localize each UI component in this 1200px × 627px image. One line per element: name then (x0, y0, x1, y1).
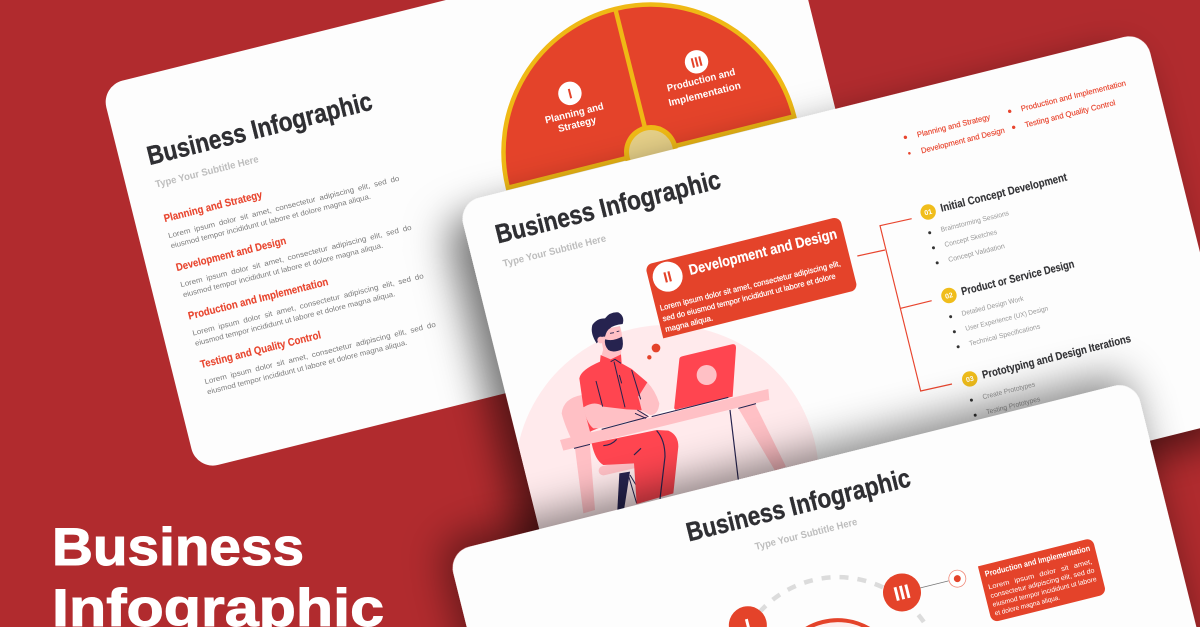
item: production and implementation: eiusmod tempor incididunt ut labore et dolore magna aliqua. (194, 289, 396, 348)
connector to target (920, 581, 949, 588)
slide 3 heading: Business Infographic (683, 463, 913, 547)
dashed cycle ring (711, 555, 965, 627)
wheel segment III (658, 42, 742, 109)
item 01: initial concept development (919, 170, 1081, 268)
item 01: initial concept development: 01 (924, 209, 933, 217)
illustration: man at laptop (560, 312, 786, 513)
item: testing and quality control: Testing and Quality Control (199, 329, 322, 371)
item: development and design (175, 205, 415, 299)
legend: Development and Design (920, 126, 1006, 155)
item 02: product or service design: User Experience (UX) Design (965, 305, 1049, 333)
callout: development and design: magna aliqua. (664, 313, 714, 334)
callout: development and design: sed do eiusmod tempor incididunt ut labore et dolore (662, 272, 836, 323)
item: production and implementation: Production and Implementation (187, 276, 330, 323)
main title (52, 518, 384, 627)
item 03: prototyping and design iterations: Testing Prototypes (986, 396, 1042, 416)
node I (725, 602, 771, 627)
legend: Planning and Strategy (916, 112, 991, 139)
item: development and design: Development and Design (175, 235, 287, 274)
item 02: product or service design: 02 (945, 292, 954, 301)
wheel segment III: Implementation (668, 81, 742, 109)
callout: production and implementation: eiusmod tempor incididunt ut labore (992, 576, 1098, 609)
slide 1 text content (144, 84, 439, 397)
item 03: prototyping and design iterations: 03 (965, 376, 975, 384)
callout: production and implementation: et dolore magna aliqua. (994, 594, 1061, 617)
item 01: initial concept development: Concept Sketches (944, 229, 998, 249)
illustration backdrop circle (518, 325, 818, 530)
item: production and implementation: Lorem ipsum dolor sit amet, consectetur adipiscing elit, sed do (191, 271, 425, 338)
target marker (947, 568, 968, 589)
slide 3 subtitle: Type Your Subtitle Here (754, 517, 859, 553)
item 02: product or service design: Product or Service Design (960, 258, 1076, 298)
item 02: product or service design: Technical Specifications (969, 323, 1042, 348)
callout: development and design: II (662, 268, 674, 287)
wheel segment I: I (566, 85, 574, 102)
item 03: prototyping and design iterations: Create Prototypes (982, 381, 1036, 401)
slide 1 subtitle: Type Your Subtitle Here (154, 154, 260, 191)
wheel segment I (537, 75, 608, 138)
main title: Business (52, 518, 304, 577)
legend: Production and Implementation (1020, 79, 1127, 113)
callout: development and design: Development and Design (687, 227, 839, 279)
wheel segment III: Production and (666, 67, 737, 95)
slide 3 content (683, 423, 1137, 627)
item 02: product or service design: Detailed Design Work (961, 296, 1025, 318)
callout: production and implementation: Lorem ipsum dolor sit amet, (988, 559, 1093, 591)
panel: slide 2 development and design (423, 33, 1200, 538)
item 01: initial concept development: Initial Concept Development (939, 172, 1069, 215)
slide 2 content (492, 63, 1196, 521)
callout: development and design: Lorem ipsum dolor sit amet, consectetur adipiscing elit, (659, 259, 842, 313)
item 02: product or service design (940, 257, 1088, 352)
wheel chart (472, 0, 801, 214)
panel: slide 1 text list with wheel (101, 0, 883, 470)
item: testing and quality control (199, 302, 439, 396)
wheel segment III: III (689, 53, 704, 71)
item: development and design: Lorem ipsum dolor sit amet, consectetur adipiscing elit, sed do (179, 223, 412, 289)
item: testing and quality control: Lorem ipsum dolor sit amet, consectetur adipiscing elit, sed do (204, 320, 437, 386)
item: planning and strategy: Lorem ipsum dolor sit amet, consectetur adipiscing elit, sed do (167, 174, 400, 240)
wheel segment I: Strategy (557, 115, 598, 135)
item: planning and strategy: Planning and Strategy (163, 189, 264, 225)
slide 2 subtitle: Type Your Subtitle Here (502, 233, 608, 270)
item: development and design: eiusmod tempor incididunt ut labore et dolore magna aliqua. (182, 241, 384, 299)
node III: III (891, 581, 913, 606)
wheel segment I: Planning and (544, 101, 605, 126)
callout: production and implementation: Production and Implementation (984, 544, 1091, 579)
callout: development and design (645, 216, 858, 338)
item 03: prototyping and design iterations: Prototyping and Design Iterations (981, 333, 1132, 382)
panel: slide 3 process cycle (448, 381, 1200, 627)
node III (879, 569, 925, 615)
item: planning and strategy (163, 156, 403, 250)
legend: Testing and Quality Control (1024, 98, 1117, 129)
item 01: initial concept development: Concept Validation (948, 243, 1006, 264)
legend (903, 79, 1131, 159)
item: testing and quality control: eiusmod tempor incididunt ut labore et dolore magna aliqua. (206, 338, 408, 396)
connector lines (857, 219, 952, 391)
slide 2 heading: Business Infographic (492, 164, 724, 249)
item: planning and strategy: eiusmod tempor incididunt ut labore et dolore magna aliqua. (170, 192, 372, 250)
item: production and implementation (187, 253, 427, 348)
slide 1 heading: Business Infographic (144, 86, 375, 171)
callout: production and implementation (978, 538, 1106, 623)
center ring (763, 607, 913, 627)
item 03: prototyping and design iterations (960, 331, 1141, 420)
item 01: initial concept development: Brainstorming Sessions (940, 210, 1010, 234)
callout: production and implementation: consectetur adipiscing elit, sed do (990, 567, 1096, 600)
